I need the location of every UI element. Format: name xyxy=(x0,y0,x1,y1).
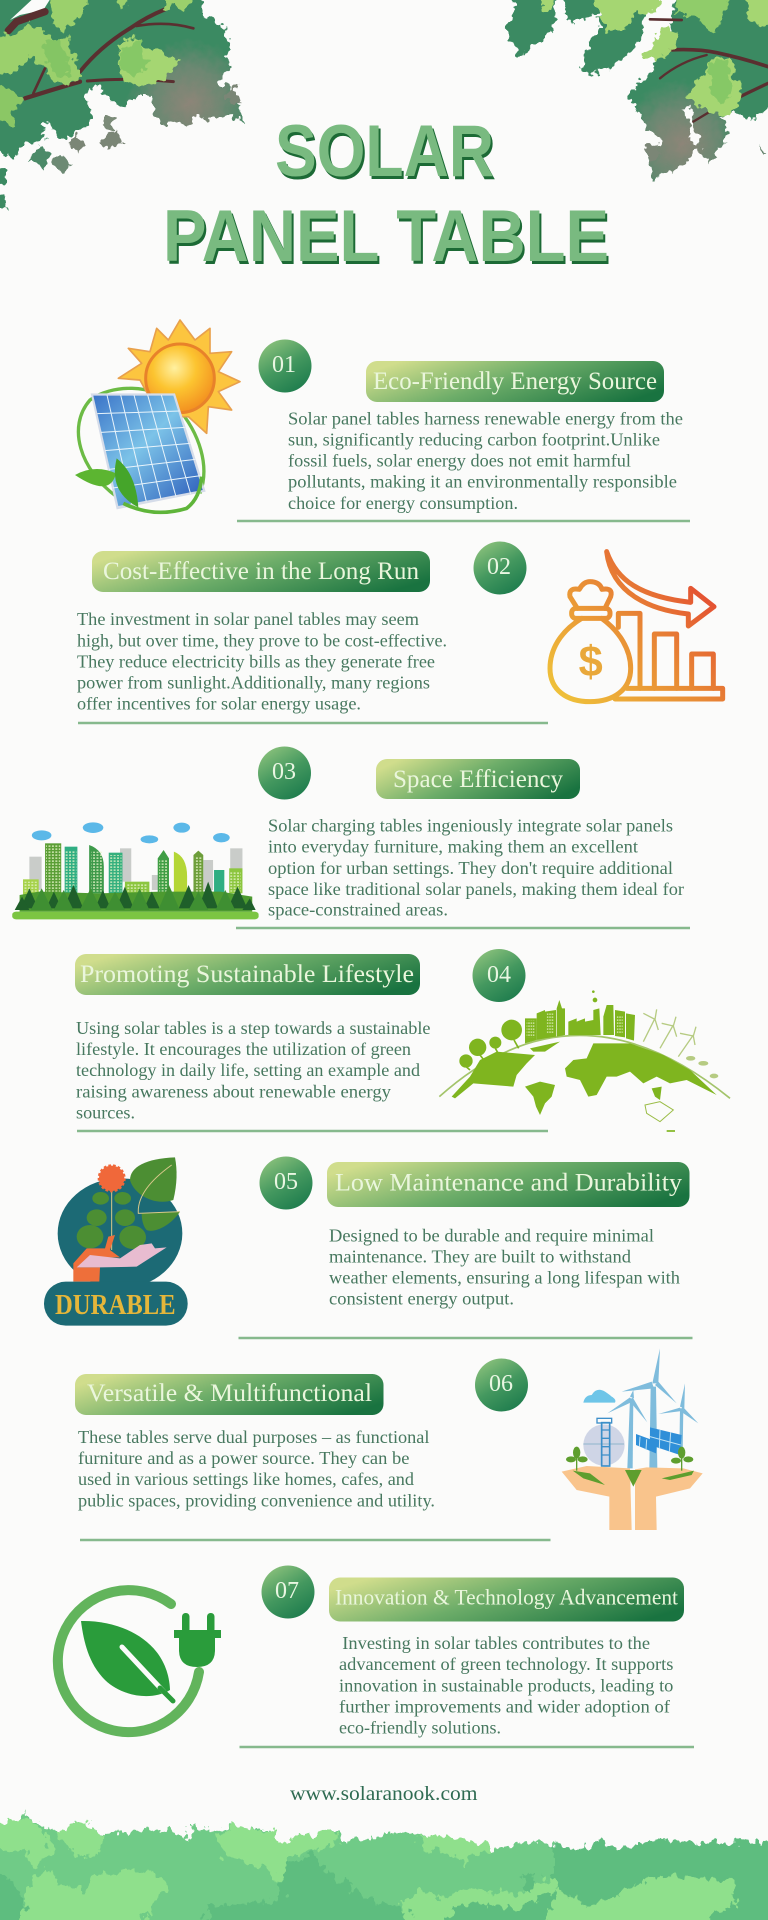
section 01 xyxy=(75,320,683,513)
number badge 07 xyxy=(262,1566,314,1618)
body text: sources. xyxy=(76,1102,135,1122)
icon: green globe with city xyxy=(439,990,730,1131)
body text xyxy=(339,1633,673,1738)
body text xyxy=(78,1427,435,1510)
foliage: bottom grass xyxy=(0,1810,768,1920)
body text: space-constrained areas. xyxy=(268,900,448,920)
number badge 01 xyxy=(258,340,312,392)
body text: They reduce electricity bills as they generate free xyxy=(77,651,435,671)
number badge 05: 05 xyxy=(274,1169,298,1195)
body text xyxy=(76,1018,431,1122)
body text: Designed to be durable and require minimal xyxy=(329,1225,654,1245)
body text: consistent energy output. xyxy=(329,1289,514,1309)
icon: leaf with plug xyxy=(58,1590,221,1732)
body text: The investment in solar panel tables may seem xyxy=(77,609,419,629)
body text: Solar panel tables harness renewable energy from the xyxy=(288,408,683,428)
icon: durable badge xyxy=(44,1157,188,1326)
body text: furniture and as a power source. They can be xyxy=(78,1448,409,1468)
icon: money bag with falling bars: $ xyxy=(579,639,603,687)
website url: www.solaranook.com xyxy=(290,1783,478,1805)
foliage: top left xyxy=(0,0,243,209)
heading pill: Eco-Friendly Energy Source xyxy=(373,368,657,395)
section 02 xyxy=(77,542,723,714)
heading pill xyxy=(329,1578,684,1622)
section 07 xyxy=(58,1566,684,1738)
icon: sun and solar panel xyxy=(75,320,240,512)
body text: choice for energy consumption. xyxy=(288,493,518,513)
body text xyxy=(288,408,683,513)
icon: money bag with falling bars xyxy=(550,552,723,702)
section 04 xyxy=(75,949,730,1131)
heading pill: Promoting Sustainable Lifestyle xyxy=(80,961,414,988)
body text: used in various settings like homes, cafes, and xyxy=(78,1469,414,1489)
body text: fossil fuels, solar energy does not emit harmful xyxy=(288,450,631,470)
number badge 05 xyxy=(260,1156,312,1210)
heading pill xyxy=(327,1162,690,1207)
body text: innovation in sustainable products, leading to xyxy=(339,1676,673,1696)
body text: technology in daily life, setting an example and xyxy=(76,1060,420,1080)
number badge 07: 07 xyxy=(275,1578,299,1604)
body text: option for urban settings. They don't require additional xyxy=(268,858,673,878)
body text: public spaces, providing convenience and utility. xyxy=(78,1490,435,1510)
number badge 03: 03 xyxy=(272,759,296,785)
heading pill: Cost-Effective in the Long Run xyxy=(103,558,419,585)
heading pill xyxy=(75,1374,384,1415)
body text: into everyday furniture, making them an excellent xyxy=(268,837,638,857)
heading pill xyxy=(92,551,430,592)
number badge 03 xyxy=(258,746,311,800)
heading pill xyxy=(75,954,420,995)
heading pill: Low Maintenance and Durability xyxy=(335,1170,683,1197)
section 03 xyxy=(12,746,684,920)
body text: Using solar tables is a step towards a sustainable xyxy=(76,1018,431,1038)
number badge 01: 01 xyxy=(272,352,296,378)
body text: advancement of green technology. It supports xyxy=(339,1654,673,1674)
body text: space like traditional solar panels, making them ideal for xyxy=(268,879,684,899)
number badge 02: 02 xyxy=(487,554,511,580)
section 05 xyxy=(44,1156,690,1326)
number badge 04 xyxy=(472,949,526,1002)
heading pill xyxy=(376,759,580,799)
body text: eco-friendly solutions. xyxy=(339,1718,501,1738)
title: SOLAR xyxy=(275,111,494,192)
number badge 06: 06 xyxy=(489,1371,513,1397)
body text xyxy=(77,609,447,714)
body text: weather elements, ensuring a long lifespan with xyxy=(329,1268,680,1288)
number badge 06 xyxy=(475,1358,528,1412)
icon: hands holding renewable energy xyxy=(562,1348,703,1530)
body text: offer incentives for solar energy usage. xyxy=(77,694,361,714)
body text: raising awareness about renewable energy xyxy=(76,1081,391,1101)
body text: lifestyle. It encourages the utilization of green xyxy=(76,1039,411,1059)
number badge 02 xyxy=(474,542,526,594)
body text: Solar charging tables ingeniously integrate solar panels xyxy=(268,816,673,836)
title: PANEL TABLE xyxy=(163,196,609,277)
body text: These tables serve dual purposes – as functional xyxy=(78,1427,430,1447)
body text: Investing in solar tables contributes to the xyxy=(342,1633,650,1653)
body text: power from sunlight.Additionally, many regions xyxy=(77,672,430,692)
body text: pollutants, making it an environmentally responsible xyxy=(288,472,677,492)
body text: further improvements and wider adoption of xyxy=(339,1696,670,1716)
body text xyxy=(268,816,684,920)
heading pill: Versatile & Multifunctional xyxy=(87,1380,372,1407)
heading pill xyxy=(366,361,664,402)
body text: high, but over time, they prove to be cost-effective. xyxy=(77,630,447,650)
icon: green city xyxy=(12,822,259,919)
section 06 xyxy=(75,1348,703,1530)
icon: durable badge: DURABLE xyxy=(55,1290,176,1321)
body text xyxy=(329,1225,680,1309)
title xyxy=(163,111,609,277)
number badge 04: 04 xyxy=(487,962,511,988)
heading pill: Innovation & Technology Advancement xyxy=(335,1584,678,1610)
heading pill: Space Efficiency xyxy=(393,766,563,793)
foliage: top right xyxy=(504,0,768,180)
body text: maintenance. They are built to withstand xyxy=(329,1246,631,1266)
body text: sun, significantly reducing carbon footprint.Unlike xyxy=(288,430,660,450)
